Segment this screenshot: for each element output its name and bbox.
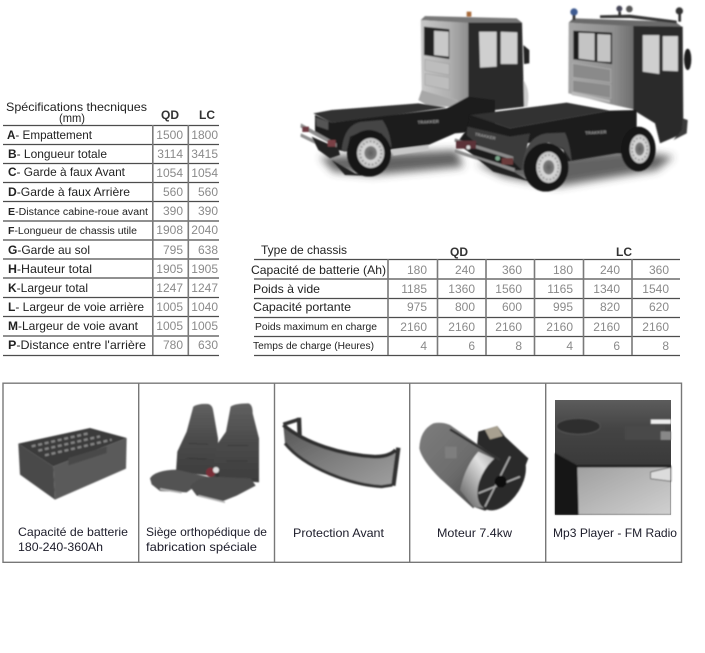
panel: equipment strip: [3, 383, 682, 562]
row labels: F-Longueur de chassis utile: [8, 226, 137, 237]
chassis values: 1185: [401, 282, 427, 296]
caption: seat: [146, 525, 267, 554]
table heading: [6, 100, 215, 125]
left truck: [300, 12, 529, 177]
row labels: G-Garde au sol: [8, 243, 90, 257]
table heading: QD: [161, 108, 179, 122]
chassis row labels: Capacité de batterie (Ah): [251, 263, 386, 277]
caption: seat: Siège orthopédique de: [146, 525, 267, 539]
QD values: 1054: [156, 166, 183, 180]
chassis values: 360: [649, 263, 669, 277]
cell: motor: [419, 423, 536, 540]
QD values: 1005: [156, 300, 183, 314]
caption: seat: fabrication spéciale: [146, 540, 257, 554]
LC values: 390: [198, 204, 218, 218]
QD values: [156, 128, 183, 352]
row labels: L- Largeur de voie arrière: [8, 300, 144, 314]
caption: protection: Protection Avant: [293, 526, 385, 540]
right truck: TRAKKER: [474, 132, 497, 141]
right truck: TRAKKER: [585, 129, 607, 136]
LC values: 1247: [191, 281, 218, 295]
right truck wheels: [524, 127, 656, 192]
QD values: 1500: [156, 128, 183, 142]
caption: battery: 180-240-360Ah: [18, 540, 103, 554]
panel frame: [3, 383, 682, 562]
LC values: 1905: [191, 262, 218, 276]
chassis values: 8: [515, 339, 522, 353]
caption: motor: Moteur 7.4kw: [437, 526, 512, 540]
chassis values: 1560: [495, 282, 522, 296]
row labels: B- Longueur totale: [8, 147, 107, 161]
chassis row labels: Capacité portante: [253, 300, 351, 314]
icon: motor: [419, 423, 536, 519]
chassis values: 180: [553, 263, 573, 277]
QD values: 560: [163, 185, 183, 199]
chassis values: 2160: [593, 320, 620, 334]
LC values: 2040: [191, 223, 218, 237]
QD values: 1908: [156, 223, 183, 237]
LC values: 3415: [191, 147, 218, 161]
chassis values: [400, 263, 669, 353]
LC values: 1800: [191, 128, 218, 142]
QD values: 3114: [157, 147, 183, 161]
chassis values: 180: [407, 263, 427, 277]
cell: seat: [146, 403, 267, 554]
chassis values: 8: [662, 339, 669, 353]
chassis values: 1360: [448, 282, 475, 296]
QD values: 795: [163, 243, 183, 257]
chassis values: 6: [468, 339, 475, 353]
QD values: 1905: [156, 262, 183, 276]
image: two chassis trucks: [300, 6, 691, 192]
row labels: M-Largeur de voie avant: [8, 319, 139, 333]
chassis values: 2160: [546, 320, 573, 334]
table heading: Spécifications thecniques: [6, 100, 147, 114]
left truck: TRAKKER: [418, 119, 440, 125]
LC values: 630: [198, 338, 218, 352]
caption: battery: Capacité de batterie: [18, 525, 128, 539]
image: cab ceiling with radio: [555, 400, 671, 515]
chassis values: 975: [407, 300, 427, 314]
QD values: 1005: [156, 319, 183, 333]
chassis table grid: [254, 259, 680, 356]
chassis values: 800: [455, 300, 475, 314]
row labels: P-Distance entre l'arrière: [8, 338, 146, 352]
chassis row labels: Poids à vide: [253, 282, 320, 296]
cell: front protection: [283, 418, 398, 540]
chassis values: 360: [502, 263, 522, 277]
row labels: D-Garde à faux Arrière: [8, 185, 130, 199]
row labels: H-Hauteur total: [8, 262, 92, 276]
table: technical specifications: [3, 100, 219, 356]
caption: radio: Mp3 Player - FM Radio: [553, 526, 677, 540]
chassis table heading: Type de chassis: [261, 243, 347, 257]
chassis values: 4: [420, 339, 427, 353]
table heading: (mm): [59, 111, 85, 125]
chassis table heading: QD: [450, 245, 468, 259]
chassis values: 240: [455, 263, 475, 277]
QD values: 390: [163, 204, 183, 218]
right truck: [454, 6, 691, 192]
chassis values: 2160: [400, 320, 427, 334]
QD values: 1247: [156, 281, 183, 295]
row labels: [7, 128, 148, 352]
row labels: A- Empattement: [7, 128, 93, 142]
chassis values: 2160: [448, 320, 475, 334]
chassis values: 2160: [495, 320, 522, 334]
LC values: [191, 128, 218, 352]
table: chassis type: [251, 243, 680, 356]
chassis values: 1165: [547, 282, 573, 296]
chassis values: 240: [600, 263, 620, 277]
LC values: 1054: [191, 166, 218, 180]
chassis values: 820: [600, 300, 620, 314]
QD values: 780: [163, 338, 183, 352]
chassis values: 600: [502, 300, 522, 314]
chassis values: 995: [553, 300, 573, 314]
chassis table heading: [261, 243, 632, 259]
ground shadow: [320, 150, 673, 187]
cell: battery: [18, 428, 128, 554]
icon: battery: [18, 428, 127, 500]
chassis row labels: Temps de charge (Heures): [253, 341, 374, 352]
chassis row labels: Poids maximum en charge: [255, 322, 377, 333]
cell: radio: [553, 400, 677, 540]
LC values: 560: [198, 185, 218, 199]
chassis row labels: [251, 263, 386, 352]
LC values: 1040: [191, 300, 218, 314]
left truck wheel: [347, 130, 391, 177]
chassis values: 620: [649, 300, 669, 314]
chassis values: 1340: [593, 282, 620, 296]
chassis values: 2160: [642, 320, 669, 334]
chassis table heading: LC: [616, 245, 632, 259]
chassis values: 6: [613, 339, 620, 353]
table heading: LC: [199, 108, 215, 122]
row labels: K-Largeur total: [8, 281, 88, 295]
icon: seats: [150, 403, 259, 502]
chassis values: 1540: [642, 282, 669, 296]
table grid: [3, 125, 219, 356]
row labels: C- Garde à faux Avant: [8, 165, 126, 179]
chassis values: 4: [566, 339, 573, 353]
icon: curved guard: [283, 418, 398, 487]
caption: battery: [18, 525, 128, 554]
LC values: 1005: [191, 319, 218, 333]
LC values: 638: [198, 243, 218, 257]
row labels: E-Distance cabine-roue avant: [8, 207, 148, 218]
